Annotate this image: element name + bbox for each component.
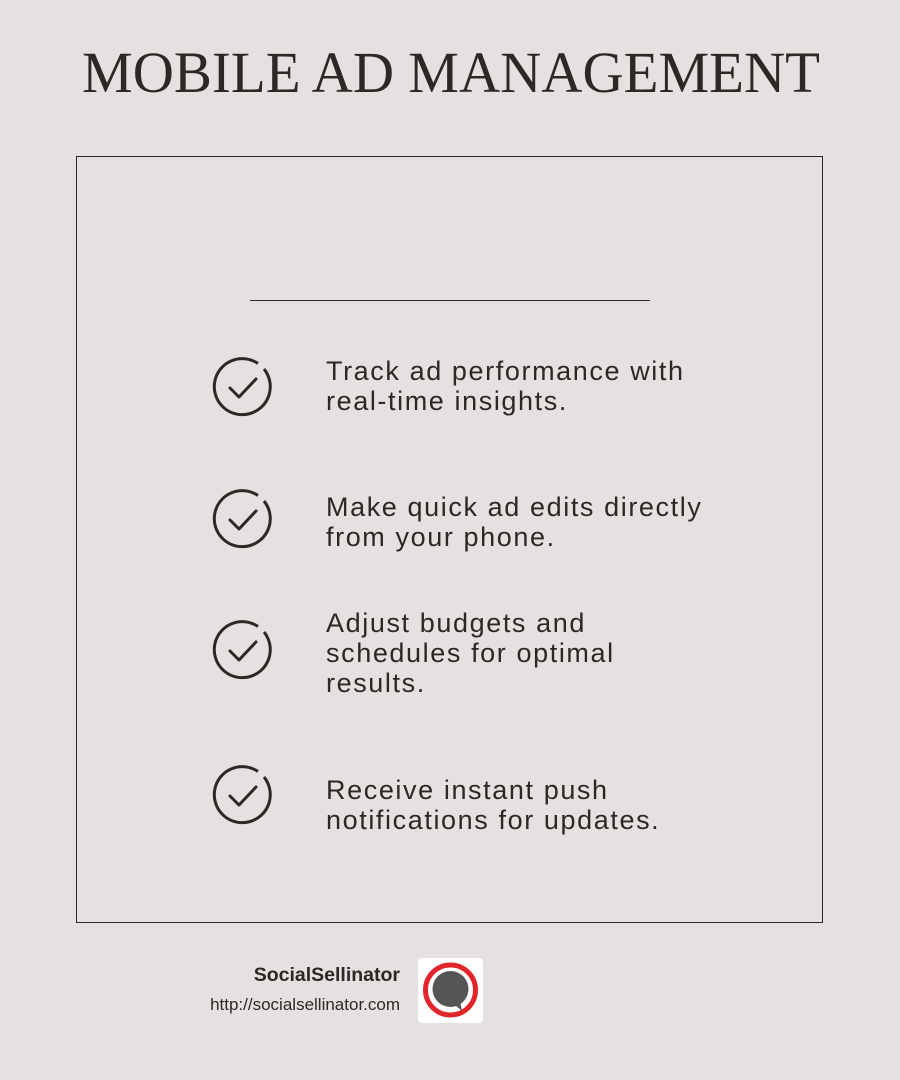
divider line [250,300,650,301]
icon: check 4 [212,765,272,824]
text 2 [326,492,702,552]
panel: list frame [76,156,823,923]
text 1: Track ad performance with [326,356,685,386]
footer brand: http://socialsellinator.com [210,995,400,1014]
text 4 [326,775,660,835]
text 1 [326,356,685,416]
icon: check 1 [212,357,272,416]
text 3: schedules for optimal [326,638,615,668]
icon: check 3 [212,620,272,680]
icon: check 2 [212,489,272,548]
text 4: notifications for updates. [326,805,660,835]
footer brand: SocialSellinator [254,964,400,986]
title: MOBILE AD MANAGEMENT [82,40,820,105]
footer brand [210,964,400,1014]
text 3: Adjust budgets and [326,608,586,638]
text 1: real-time insights. [326,386,568,416]
text 4: Receive instant push [326,775,609,805]
text 2: Make quick ad edits directly [326,492,702,522]
text 2: from your phone. [326,522,556,552]
text 3 [326,608,615,698]
icon: logo [418,958,483,1023]
text 3: results. [326,668,426,698]
